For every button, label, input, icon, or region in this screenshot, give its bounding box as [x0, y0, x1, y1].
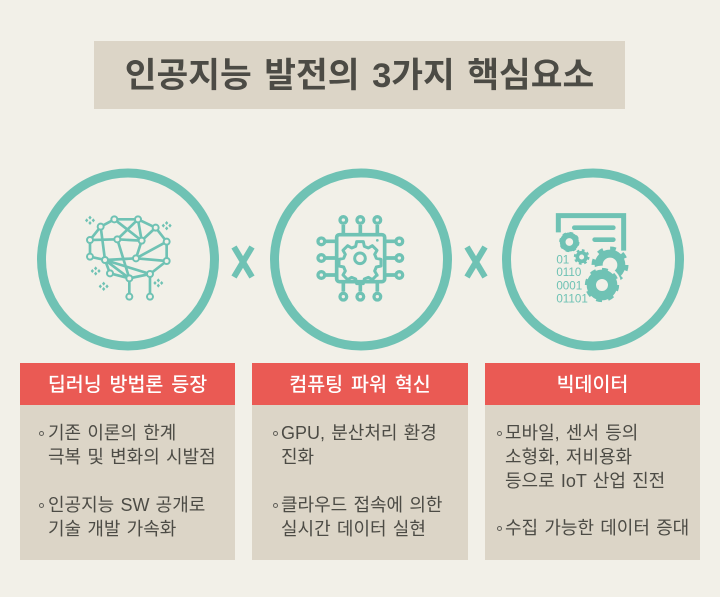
icon: big data circle with gears: 0110	[556, 266, 582, 279]
icon: multiply sign 2	[464, 246, 488, 278]
bullet text 2: 인공지능 SW 공개로 기술 개발 가속화	[48, 495, 205, 539]
bullet text 1: GPU, 분산처리 환경 진화	[281, 423, 437, 467]
bullet text 1: 모바일, 센서 등의 소형화, 저비용화 등으로 IoT 산업 진전	[505, 423, 665, 491]
heading: deep learning	[20, 363, 235, 405]
icon: big data circle with gears: 01	[556, 254, 569, 267]
heading: big data: 빅데이터	[557, 374, 628, 396]
icon: deep learning circle with brain	[37, 168, 219, 350]
panel body: computing power	[252, 405, 468, 560]
panel: computing power	[252, 363, 468, 560]
icon: big data circle with gears: 0001	[556, 279, 582, 292]
icon: big data circle with gears	[502, 168, 684, 350]
bullet text 2: 클라우드 접속에 의한 실시간 데이터 실현	[281, 495, 442, 539]
title	[94, 41, 625, 109]
panel: deep learning	[20, 363, 235, 560]
heading: deep learning: 딥러닝 방법론 등장	[48, 374, 207, 396]
bullet text 2: 수집 가능한 데이터 증대	[505, 518, 689, 538]
icon: big data circle with gears: 01101	[556, 293, 588, 306]
heading: big data	[485, 363, 700, 405]
panel body: deep learning	[20, 405, 235, 560]
bullet text 1: 기존 이론의 한계 극복 및 변화의 시발점	[48, 423, 216, 467]
title: 인공지능 발전의 3가지 핵심요소	[125, 57, 594, 95]
heading: computing power: 컴퓨팅 파워 혁신	[289, 374, 431, 396]
icon: computing circle with chip	[270, 168, 452, 350]
panel body: big data	[485, 405, 700, 560]
heading: computing power	[252, 363, 468, 405]
panel: big data	[485, 363, 700, 560]
icon: multiply sign 1	[232, 246, 254, 278]
